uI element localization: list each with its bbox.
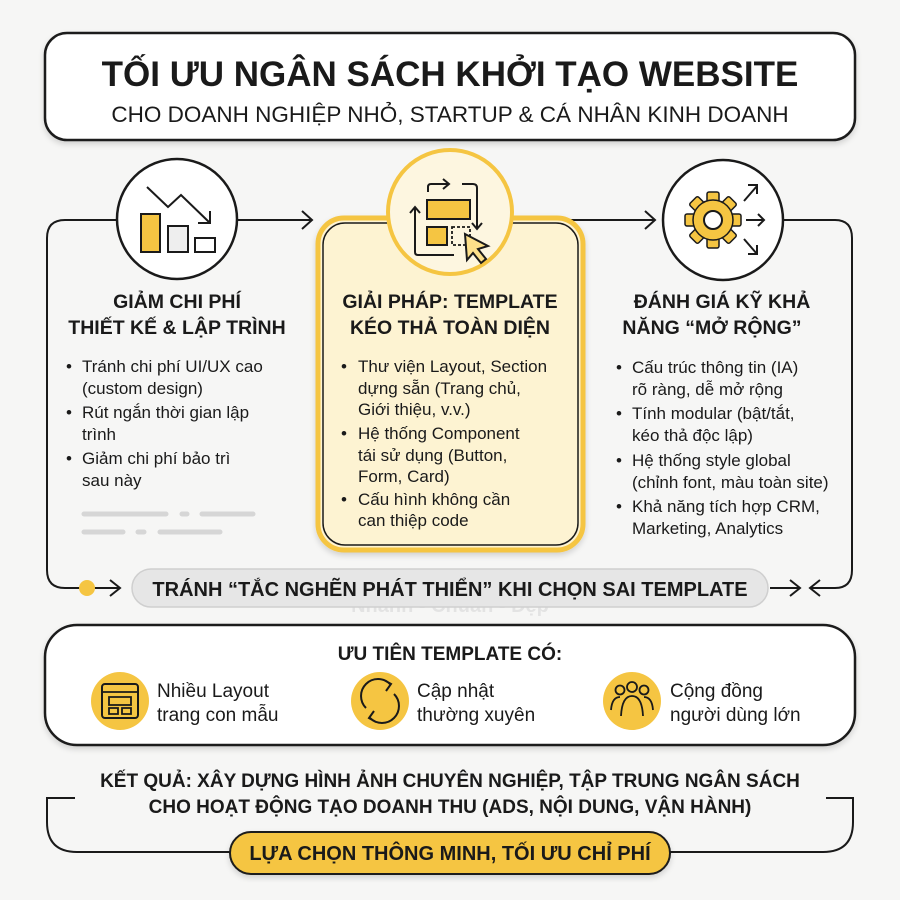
warning pill: TRÁNH “TẮC NGHẼN PHÁT THIỂN” KHI CHỌN SAI TEMPLATE	[152, 577, 748, 601]
bullets: cost reduction: •	[66, 403, 72, 422]
bullets: cost reduction: sau này	[82, 471, 142, 490]
heading: scalability: ĐÁNH GIÁ KỸ KHẢ	[634, 290, 810, 313]
heading: cost reduction: GIẢM CHI PHÍ	[113, 290, 241, 313]
watermark: Nhanh - Chuẩn - Đẹp	[351, 595, 549, 617]
bullets: scalability: Cấu trúc thông tin (IA)	[632, 358, 798, 377]
panel: solution (highlighted)	[318, 150, 583, 550]
text: layout: Nhiều Layout	[157, 681, 270, 702]
bullets: scalability: (chỉnh font, màu toàn site)	[632, 473, 829, 492]
text: layout: trang con mẫu	[157, 704, 278, 726]
bullets: cost reduction: •	[66, 357, 72, 376]
heading: scalability: NĂNG “MỞ RỘNG”	[622, 315, 802, 339]
heading: scalability	[622, 290, 810, 339]
bullets: solution: tái sử dụng (Button,	[358, 446, 507, 465]
text: community	[670, 681, 801, 726]
heading: solution: GIẢI PHÁP: TEMPLATE	[342, 290, 558, 313]
icon: drag drop template	[388, 150, 512, 274]
final pill: LỰA CHỌN THÔNG MINH, TỐI ƯU CHỈ PHÍ	[249, 841, 651, 865]
bullets: scalability: Tính modular (bật/tắt,	[632, 404, 795, 423]
title: TỐI ƯU NGÂN SÁCH KHỞI TẠO WEBSITE	[102, 54, 798, 94]
flow connector lines	[47, 211, 852, 596]
result text: CHO HOẠT ĐỘNG TẠO DOANH THU (ADS, NỘI DUNG, VẬN HÀNH)	[149, 796, 751, 818]
icon: scalability gear	[663, 160, 783, 280]
bullets: scalability: Khả năng tích hợp CRM,	[632, 497, 820, 516]
start dot	[79, 580, 95, 596]
bullets: scalability: •	[616, 358, 622, 377]
final pill	[230, 832, 670, 874]
bullets: scalability: •	[616, 497, 622, 516]
panel: solution (highlighted): KÉO THẢ TOÀN DIỆN	[350, 315, 550, 339]
heading: cost reduction: THIẾT KẾ & LẬP TRÌNH	[68, 315, 286, 339]
title box	[45, 33, 855, 140]
bullets: cost reduction: (custom design)	[82, 379, 203, 398]
bullets: scalability: •	[616, 404, 622, 423]
text: community: người dùng lớn	[670, 705, 801, 726]
bullets: solution: Giới thiệu, v.v.)	[358, 400, 471, 419]
bullets: scalability: •	[616, 451, 622, 470]
subtitle: CHO DOANH NGHIỆP NHỎ, STARTUP & CÁ NHÂN KINH DOANH	[111, 102, 789, 127]
bullets: solution: can thiệp code	[358, 511, 469, 530]
bullets: solution: Thư viện Layout, Section	[358, 357, 547, 376]
bullets: solution: •	[341, 424, 347, 443]
bullets: cost reduction: Tránh chi phí UI/UX cao	[82, 357, 263, 376]
text: update	[417, 681, 535, 726]
bullets: cost reduction: •	[66, 449, 72, 468]
text: update: thường xuyên	[417, 705, 535, 726]
panel: priorities	[45, 625, 855, 745]
bracket	[47, 798, 853, 852]
icon: layout	[91, 672, 149, 730]
icon: community	[603, 672, 661, 730]
warning pill	[132, 569, 768, 607]
bullets: scalability: Hệ thống style global	[632, 451, 791, 470]
bullets: scalability: rõ ràng, dễ mở rộng	[632, 380, 783, 399]
bullets: solution: Form, Card)	[358, 467, 450, 486]
bullets: solution: Hệ thống Component	[358, 424, 520, 443]
text: update: Cập nhật	[417, 681, 495, 702]
bullets: solution: Cấu hình không cần	[358, 490, 510, 509]
result text	[100, 770, 800, 818]
bullets: solution: dựng sẵn (Trang chủ,	[358, 379, 521, 398]
bullets: cost reduction: Giảm chi phí bảo trì	[82, 449, 230, 468]
bullets: cost reduction: trình	[82, 425, 116, 444]
bullets: scalability: kéo thả độc lập)	[632, 426, 753, 445]
bullets: solution: •	[341, 357, 347, 376]
bullets: cost reduction: Rút ngắn thời gian lập	[82, 403, 249, 422]
heading: cost reduction	[68, 290, 286, 339]
heading: priorities: ƯU TIÊN TEMPLATE CÓ:	[338, 643, 562, 665]
bullets: solution	[341, 357, 547, 530]
bullets: cost reduction	[66, 357, 263, 490]
bullets: scalability	[616, 358, 829, 538]
placeholder lines	[84, 514, 253, 532]
text: community: Cộng đồng	[670, 681, 763, 702]
result text: KẾT QUẢ: XÂY DỰNG HÌNH ẢNH CHUYÊN NGHIỆP, TẬP TRUNG NGÂN SÁCH	[100, 770, 800, 792]
bullets: solution: •	[341, 490, 347, 509]
bullets: scalability: Marketing, Analytics	[632, 519, 783, 538]
text: layout	[157, 681, 278, 726]
icon: cost reduction chart	[117, 159, 237, 279]
icon: update	[351, 672, 409, 730]
